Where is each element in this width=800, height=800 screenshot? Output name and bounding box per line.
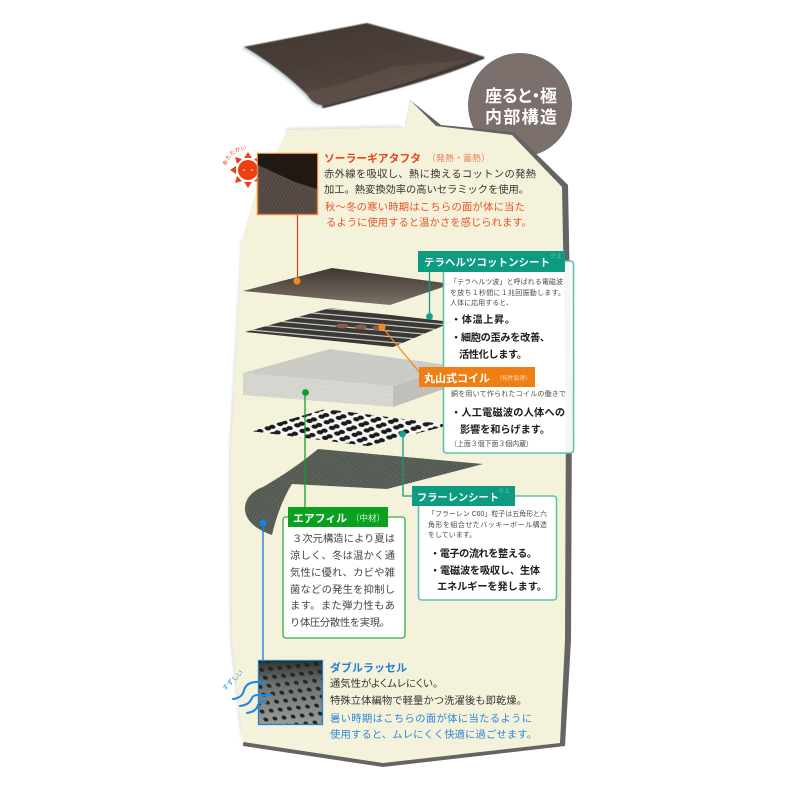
heading: terahertz cotton sheet: ※１	[550, 253, 562, 260]
leader line: taffeta	[293, 214, 301, 285]
panel: air-fill core: ます。また弾力性もあ	[290, 599, 395, 612]
leader line: terahertz cotton sheet	[426, 272, 433, 320]
panel: terahertz cotton sheet and coil: 活性化します。	[459, 348, 527, 361]
panel: terahertz cotton sheet and coil: ・細胞の歪みを改善、	[451, 331, 550, 344]
photo: solar gear taffeta	[258, 154, 318, 214]
panel: terahertz cotton sheet and coil: を放ち１秒間に１兆回振動します。	[450, 288, 565, 297]
heading: terahertz cotton sheet: テラヘルツコットンシート	[424, 257, 550, 269]
text block: solar gear taffeta: （発熱・蓄熱）	[427, 152, 490, 163]
heading: fullerene sheet: ※２	[498, 488, 510, 495]
text block: solar gear taffeta: 赤外線を吸収し、熱に換えるコットンの発熱	[324, 168, 537, 180]
layer: fullerene dotted sheet	[250, 409, 450, 446]
text block: double raschel: 暑い時期はこちらの面が体に当たるように	[330, 712, 532, 725]
text block: double raschel: 使用すると、ムレにくく快適に過ごせます。	[330, 728, 537, 741]
heading badge: 座ると・極 内部構造: 座ると・極	[485, 87, 557, 106]
leader line: coil	[378, 323, 420, 373]
heading: Maruyama coil: （特許取得）	[496, 374, 531, 382]
panel: fullerene sheet	[412, 486, 556, 600]
panel: terahertz cotton sheet and coil: 銅を用いて作られたコイルの働きで	[451, 389, 566, 398]
panel: fullerene sheet: エネルギーを発します。	[437, 580, 547, 593]
panel: fullerene sheet: ・電子の流れを整える。	[430, 547, 537, 560]
panel: fullerene sheet: をしています。	[428, 531, 476, 539]
panel: air-fill core: ３次元構造により夏は	[292, 532, 395, 545]
panel: terahertz cotton sheet and coil: ・人工電磁波の人体への	[451, 406, 565, 419]
text block: solar gear taffeta: ソーラーギアタフタ	[324, 152, 421, 165]
text block: solar gear taffeta: るように使用すると温かさを感じられます。	[326, 216, 532, 229]
icon: cool breeze waves	[220, 668, 272, 713]
speech bubble panel	[229, 100, 572, 767]
panel: terahertz cotton sheet and coil	[418, 251, 574, 453]
heading: terahertz cotton sheet	[418, 251, 565, 272]
heading: air-fill: （中材）	[351, 513, 385, 523]
heading badge: 座ると・極 内部構造: 内部構造	[485, 108, 557, 127]
leader line: double raschel	[260, 520, 266, 660]
panel: air-fill core: 涼しく、冬は温かく通	[290, 549, 396, 562]
panel: fullerene sheet: 角形を組合せたバッキーボール構造	[428, 520, 547, 529]
text block: double raschel: 通気性がよくムレにくい。	[330, 677, 438, 690]
heading: fullerene sheet: フラーレンシート	[417, 492, 499, 504]
leader line: air-fill	[302, 389, 309, 508]
icon: cool breeze waves: すずしい	[220, 668, 245, 692]
text block: double raschel: 特殊立体編物で軽量かつ洗濯後も即乾燥。	[330, 694, 527, 707]
photo: double raschel mesh	[258, 660, 322, 724]
text block: solar gear taffeta: 秋〜冬の寒い時期はこちらの面が体に当た	[325, 200, 525, 214]
heading: Maruyama coil	[419, 367, 535, 387]
text block: solar gear taffeta: 加工。熱変換効率の高いセラミックを使用。	[324, 183, 529, 196]
text block: double raschel	[330, 660, 537, 741]
cushion photo	[243, 23, 485, 108]
heading: fullerene sheet	[412, 486, 515, 506]
text block: double raschel: ダブルラッセル	[330, 660, 407, 674]
heading badge: 座ると・極 内部構造	[468, 53, 572, 157]
panel: terahertz cotton sheet and coil: ・体温上昇。	[451, 313, 515, 326]
panel: terahertz cotton sheet and coil: 「テラヘルツ波」と呼ばれる電磁波	[450, 277, 563, 286]
heading: air-fill: エアフィル	[293, 512, 347, 525]
panel: fullerene sheet: ・電磁波を吸収し、生体	[430, 564, 541, 577]
panel: air-fill core: り体圧分散性を実現。	[290, 616, 390, 629]
icon: warm sun: あたたかい	[222, 146, 246, 166]
layer: air-fill foam block	[243, 349, 455, 407]
panel: fullerene sheet: 「フラーレン C60」粒子は五角形と六	[428, 509, 547, 518]
leader line: fullerene	[399, 431, 413, 496]
text block: solar gear taffeta	[324, 152, 537, 229]
panel: terahertz cotton sheet and coil: （上面３個下面３個内蔵）	[450, 439, 533, 448]
panel: terahertz cotton sheet and coil: 影響を和らげます。	[460, 423, 550, 436]
layer: solar gear taffeta sheet	[243, 268, 452, 305]
panel: air-fill core	[283, 507, 405, 638]
icon: warm sun	[222, 146, 257, 188]
heading: Maruyama coil: 丸山式コイル	[424, 371, 490, 385]
layer: terahertz cotton sheet with coils	[245, 308, 452, 347]
panel: terahertz cotton sheet and coil: 人体に応用すると、	[450, 298, 513, 307]
panel: air-fill core: 菌などの発生を抑制し	[290, 583, 395, 596]
heading: air-fill	[288, 507, 388, 527]
layer: double raschel mesh with curled corner	[245, 449, 483, 535]
panel: air-fill core: 気性に優れ、カビや雑	[290, 566, 395, 579]
